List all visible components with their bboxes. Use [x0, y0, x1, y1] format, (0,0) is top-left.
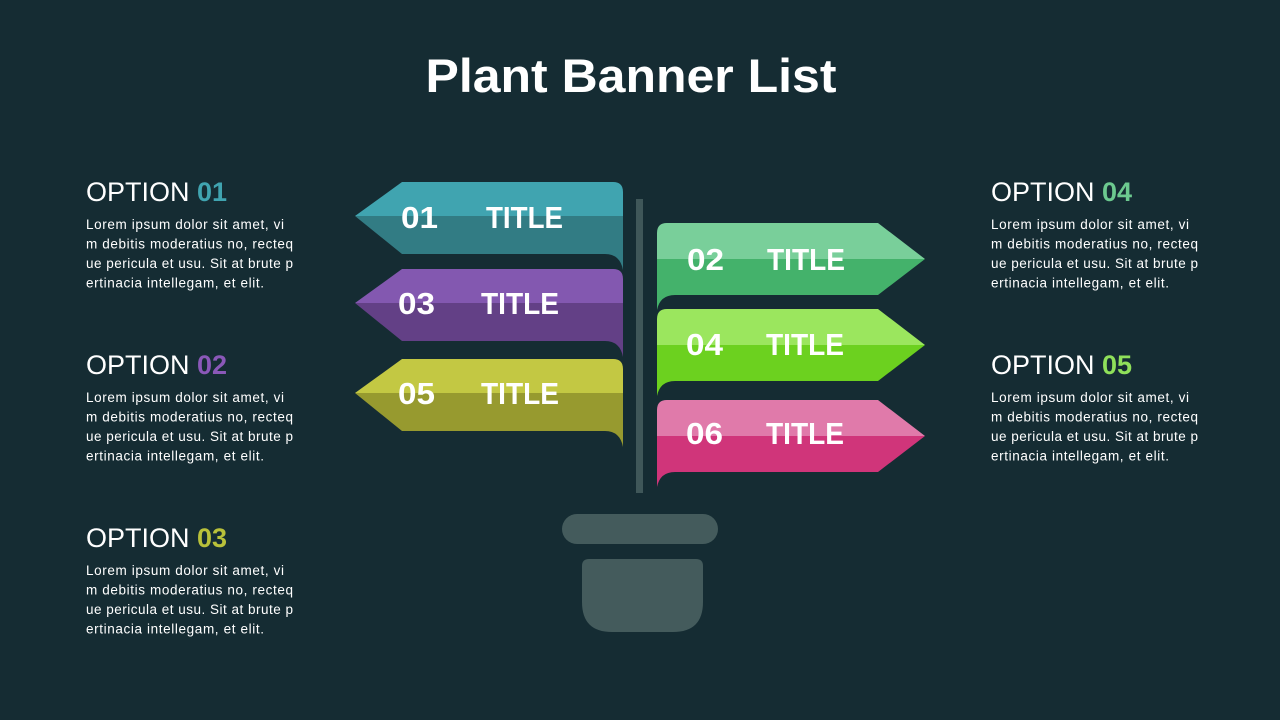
option texts: OPTION 01 — [86, 177, 227, 207]
banner labels — [398, 200, 845, 451]
option texts: m debitis moderatius no, recteq — [86, 236, 293, 252]
option texts: m debitis moderatius no, recteq — [86, 410, 293, 424]
banner labels: TITLE — [766, 416, 844, 451]
banner 01 — [355, 182, 623, 270]
banner labels: 02 — [687, 242, 724, 277]
option texts: ertinacia intellegam, et elit. — [86, 448, 264, 464]
option texts: ue pericula et usu. Sit at brute p — [991, 256, 1198, 271]
pole — [636, 199, 643, 493]
banner labels: TITLE — [481, 286, 559, 321]
option texts: ue pericula et usu. Sit at brute p — [86, 602, 293, 617]
banner labels: 03 — [398, 286, 435, 321]
banner 04 — [657, 309, 925, 396]
option texts: ertinacia intellegam, et elit. — [991, 448, 1169, 464]
banner labels: TITLE — [767, 242, 845, 277]
option texts: Lorem ipsum dolor sit amet, vi — [86, 563, 284, 578]
option texts: m debitis moderatius no, recteq — [991, 410, 1198, 424]
banner 06 — [657, 400, 925, 487]
banner labels: 01 — [401, 200, 438, 235]
banner 03 — [355, 269, 623, 357]
option texts: Lorem ipsum dolor sit amet, vi — [86, 390, 284, 405]
option texts: ue pericula et usu. Sit at brute p — [86, 429, 293, 444]
banner 02 — [657, 223, 925, 310]
banner labels: TITLE — [486, 200, 563, 235]
pot — [562, 514, 718, 632]
option texts: ue pericula et usu. Sit at brute p — [991, 429, 1198, 444]
option texts: OPTION 05 — [991, 350, 1132, 380]
option texts: Lorem ipsum dolor sit amet, vi — [86, 217, 284, 232]
banner labels: 04 — [686, 327, 724, 362]
option texts: ertinacia intellegam, et elit. — [86, 276, 264, 290]
option texts: m debitis moderatius no, recteq — [991, 236, 1198, 252]
option texts: ertinacia intellegam, et elit. — [86, 622, 264, 636]
option texts: Lorem ipsum dolor sit amet, vi — [991, 217, 1189, 232]
option texts: Lorem ipsum dolor sit amet, vi — [991, 390, 1189, 405]
banner labels: TITLE — [766, 327, 844, 362]
option texts — [86, 177, 1198, 636]
option texts: OPTION 03 — [86, 523, 227, 553]
option texts: OPTION 04 — [991, 177, 1132, 207]
banner labels: TITLE — [481, 376, 559, 411]
title: Plant Banner List — [426, 49, 837, 102]
option texts: m debitis moderatius no, recteq — [86, 582, 293, 598]
option texts: ertinacia intellegam, et elit. — [991, 276, 1169, 290]
option texts: OPTION 02 — [86, 350, 227, 380]
banner 05 — [355, 359, 623, 447]
banner labels: 05 — [398, 376, 435, 411]
banner labels: 06 — [686, 416, 723, 451]
option texts: ue pericula et usu. Sit at brute p — [86, 256, 293, 271]
